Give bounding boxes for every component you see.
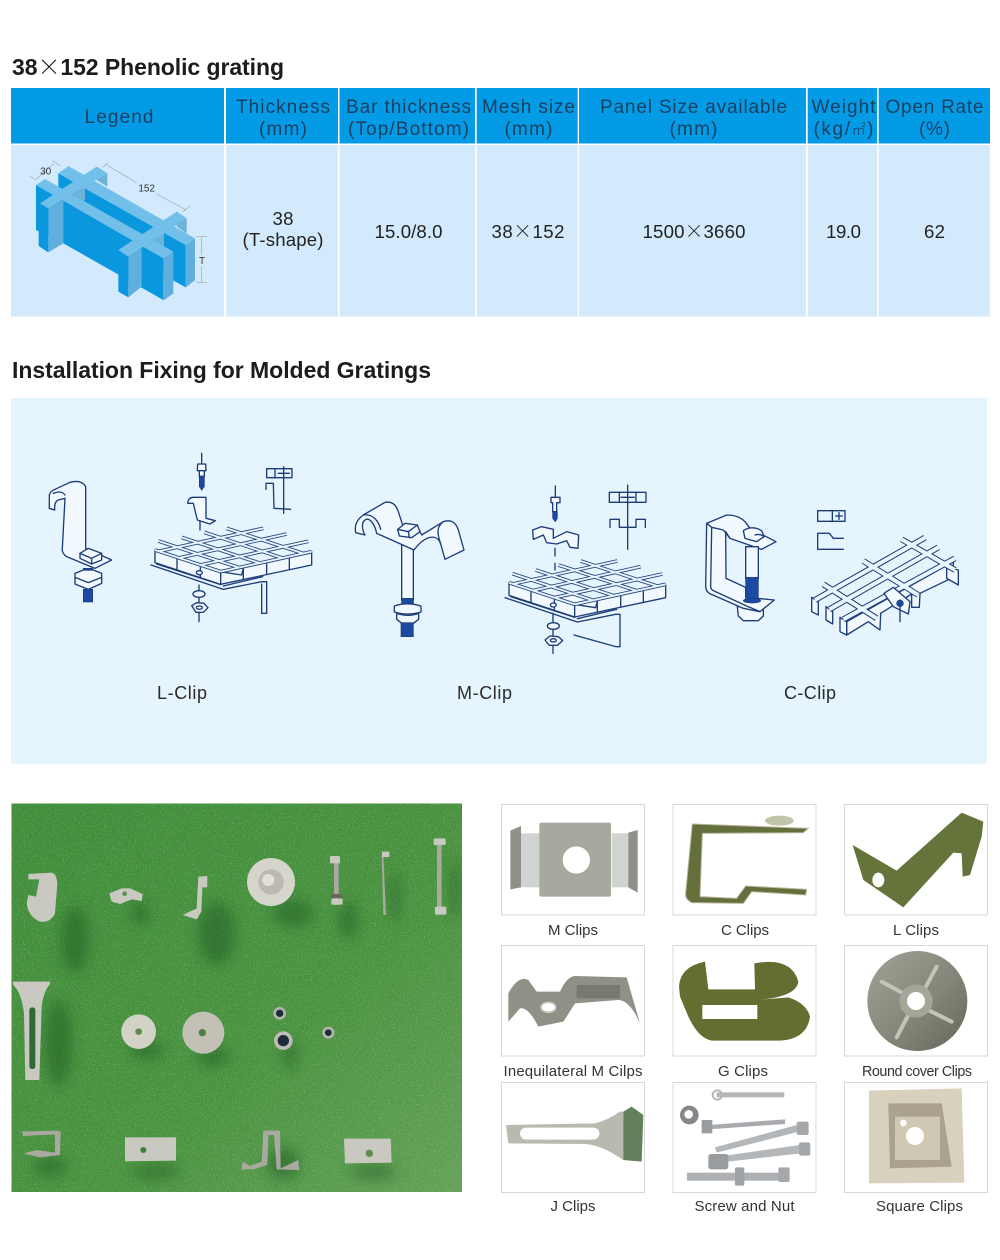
- C-Clip label: C-Clip: [784, 683, 836, 703]
- thumbnail: Screw and Nut: [673, 1082, 816, 1215]
- thumbnail: Round cover Clips: [844, 946, 988, 1080]
- table body row: (T-shape): [242, 229, 324, 250]
- legend: isometric grating diagram: 30: [40, 166, 52, 177]
- table header row: Open Rate: [886, 97, 984, 118]
- thumbnail: L Clips: [844, 804, 988, 939]
- legend: isometric grating diagram: 152: [138, 183, 155, 194]
- table body row: 19.0: [826, 221, 861, 242]
- top row fixings: [27, 838, 446, 922]
- thumbnail: Screw and Nut: Screw and Nut: [694, 1198, 795, 1215]
- table header row: Panel Size available: [600, 97, 787, 118]
- table body row: 62: [924, 221, 945, 242]
- legend: isometric grating diagram: [29, 161, 207, 301]
- bottom row fixings: [22, 1131, 392, 1170]
- thumbnail: Round cover Clips: Round cover Clips: [862, 1064, 972, 1080]
- thumbnail: G Clips: [673, 946, 816, 1080]
- M-clip exploded grating view: [505, 486, 666, 653]
- M-Clip illustrations: [355, 485, 666, 653]
- table header row: (kg/㎡): [814, 119, 874, 140]
- thumbnail: C Clips: [673, 804, 816, 939]
- M-Clip label: M-Clip: [457, 683, 512, 703]
- thumbnail: Inequilateral M Clips: [502, 946, 644, 1080]
- M-clip plan and section sketch: [609, 485, 646, 549]
- L-clip plan and section sketch: [266, 467, 292, 513]
- table body row: 38×152: [492, 217, 564, 244]
- L-clip hardware: [49, 481, 112, 602]
- thumbnail: Inequilateral M Clips: Inequilateral M Cilps: [504, 1063, 642, 1080]
- M-clip hardware: [355, 502, 464, 637]
- table body row: 15.0/8.0: [374, 221, 442, 242]
- table header row: Weight: [812, 97, 876, 118]
- table header row: (mm): [670, 119, 718, 140]
- table header row: (%): [919, 119, 950, 140]
- thumbnail gallery: clips: [502, 804, 988, 1215]
- legend: isometric grating diagram: T: [199, 256, 205, 267]
- thumbnail: Square Clips: Square Clips: [876, 1198, 963, 1215]
- title: 38x152 Phenolic grating: 38×152 Phenolic grating: [12, 48, 284, 82]
- table header row: (Top/Bottom): [348, 119, 469, 140]
- table header row: Mesh size: [482, 97, 575, 118]
- table header row: [11, 88, 990, 144]
- table header row: Bar thickness: [346, 97, 471, 118]
- table header row: (mm): [259, 119, 307, 140]
- thumbnail: G Clips: G Clips: [718, 1063, 768, 1080]
- panel: clip installation diagrams: [11, 398, 987, 764]
- C-clip hardware: [706, 515, 776, 621]
- C-clip plan and section sketch: [818, 511, 845, 549]
- L-Clip illustrations: [49, 453, 312, 622]
- thumbnail: J Clips: [502, 1082, 644, 1215]
- C-clip grating view: [812, 538, 958, 635]
- thumbnail: C Clips: C Clips: [721, 922, 769, 939]
- thumbnail: M Clips: M Clips: [548, 922, 598, 939]
- photo: assorted fixings on green mat: [12, 804, 462, 1192]
- table body row: 38: [272, 208, 294, 229]
- specification table: [11, 88, 990, 316]
- thumbnail: J Clips: J Clips: [550, 1198, 596, 1215]
- dimension lines: [29, 161, 207, 283]
- thumbnail: Square Clips: [844, 1082, 988, 1215]
- table header row: Thickness: [236, 97, 330, 118]
- L-clip exploded grating view: [151, 453, 312, 622]
- object shadows: [33, 860, 460, 1180]
- table body row: [11, 145, 990, 316]
- thumbnail: M Clips: [502, 804, 644, 939]
- L-Clip label: L-Clip: [157, 683, 207, 703]
- table body row: 1500×3660: [642, 217, 746, 244]
- table header row: (mm): [504, 119, 552, 140]
- middle row fixings: [13, 982, 334, 1080]
- thumbnail: L Clips: L Clips: [893, 922, 939, 939]
- heading: Installation Fixing: Installation Fixing for Molded Gratings: [12, 357, 431, 383]
- table header row: Legend: [84, 107, 154, 128]
- C-Clip illustrations: [706, 511, 958, 635]
